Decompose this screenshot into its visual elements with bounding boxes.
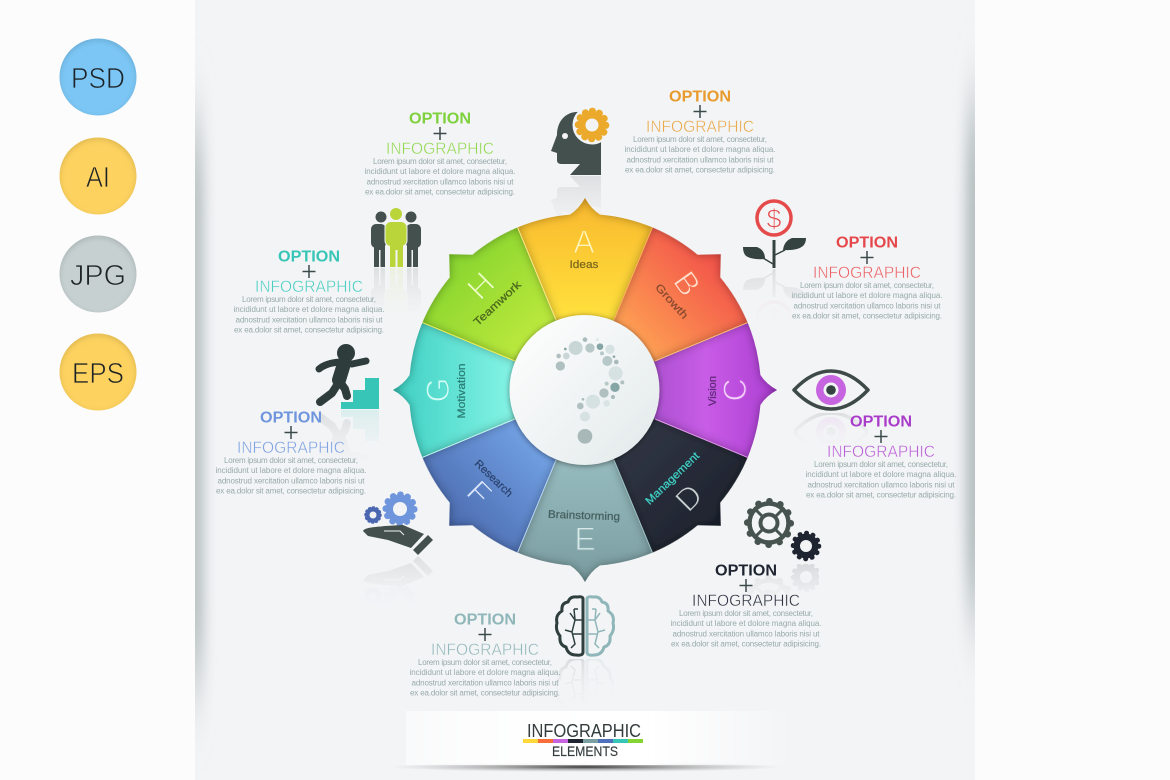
text block: E grey teal: Lorem ipsum dolor sit amet, consectetur, (418, 658, 552, 667)
segment E (518, 455, 652, 582)
text block: F blue: ex ea.dolor sit amet, consectetur adipisicing. (216, 486, 366, 496)
text block: B red: Lorem ipsum dolor sit amet, consectetur, (800, 281, 934, 290)
text block: G teal (234, 248, 384, 334)
letter H and label Teamwork: H (460, 265, 502, 307)
wheel (393, 198, 777, 582)
icon reflections (319, 176, 868, 717)
letter E and label Brainstorming: E (574, 521, 596, 557)
text block: C purple: Lorem ipsum dolor sit amet, consectetur, (814, 460, 948, 469)
text block: F blue: Lorem ipsum dolor sit amet, consectetur, (224, 456, 358, 465)
text block: D dark: OPTION (715, 562, 777, 580)
text block: H green (364, 110, 516, 196)
text block: H green: ex ea.dolor sit amet, consectetur adipisicing. (365, 188, 515, 196)
text block: D dark: INFOGRAPHIC (692, 591, 800, 610)
letter E and label Brainstorming: Brainstorming (548, 509, 620, 523)
badge: PSD (60, 38, 136, 116)
letter A and label Ideas (570, 224, 599, 271)
segment B (583, 207, 768, 392)
text block: F blue (216, 410, 366, 496)
bottom banner (390, 711, 800, 772)
letter H and label Teamwork: Teamwork (472, 278, 524, 329)
text block: G teal: ex ea.dolor sit amet, consectetur adipisicing. (234, 326, 384, 334)
segment edge highlights (422, 227, 748, 553)
letter B and label Growth: Growth (652, 282, 690, 322)
banner subtitle: ELEMENTS (552, 743, 618, 759)
letter C and label Vision (707, 376, 753, 406)
text block: H green: INFOGRAPHIC (386, 139, 494, 158)
text block: D dark: Lorem ipsum dolor sit amet, consectetur, (679, 609, 813, 618)
text block: G teal: adnostrud xercitation ullamco laboris nisi ut (236, 316, 383, 324)
text block: B red: adnostrud xercitation ullamco laboris nisi ut (794, 302, 941, 310)
letter D and label Management: D (668, 477, 710, 519)
text block: A orange: adnostrud xercitation ullamco laboris nisi ut (626, 156, 774, 164)
text block: F blue: incididunt ut labore et dolore magna aliqua. (216, 466, 366, 475)
center disc (510, 315, 660, 465)
banner title: INFOGRAPHIC (527, 721, 641, 741)
letter A and label Ideas: Ideas (570, 259, 599, 271)
text block: C purple: incididunt ut labore et dolore magna aliqua. (806, 470, 956, 479)
text block: G teal: Lorem ipsum dolor sit amet, consectetur, (242, 295, 376, 304)
text block: E grey teal: incididunt ut labore et dolore magna aliqua. (410, 668, 560, 677)
letter G and label Motivation (420, 364, 468, 418)
text block: C purple: INFOGRAPHIC (827, 442, 935, 461)
text block: F blue: OPTION (260, 410, 322, 426)
letter F and label Research: F (460, 473, 499, 512)
letter H and label Teamwork (460, 265, 524, 329)
text block: G teal: INFOGRAPHIC (255, 277, 363, 296)
letter F and label Research (460, 458, 515, 512)
segment C (650, 323, 777, 457)
letter B and label Growth (652, 265, 708, 322)
text block: F blue: adnostrud xercitation ullamco laboris nisi ut (218, 476, 365, 486)
letter A and label Ideas: A (573, 224, 595, 260)
text block: D dark (670, 562, 822, 648)
text block: H green: Lorem ipsum dolor sit amet, consectetur, (373, 157, 507, 166)
badge: JPG (60, 236, 136, 312)
segment G (393, 323, 520, 457)
text block: D dark: ex ea.dolor sit amet, consectetur adipisicing. (671, 640, 821, 648)
text block: G teal: OPTION (278, 248, 340, 266)
segment F (402, 388, 587, 573)
icon: brain (556, 597, 614, 655)
text block: B red (792, 234, 942, 320)
text block: E grey teal: adnostrud xercitation ullamco laboris nisi ut (412, 678, 559, 688)
text block: E grey teal: OPTION (454, 612, 516, 628)
text block: H green: adnostrud xercitation ullamco laboris nisi ut (366, 178, 514, 186)
icon: head with gear (551, 106, 612, 175)
letter E and label Brainstorming (548, 509, 620, 557)
icon: hand holding gears (363, 494, 433, 555)
badge: PSD: PSD (71, 63, 125, 95)
letter C and label Vision: Vision (707, 376, 719, 406)
letter D and label Management (643, 450, 710, 519)
letter C and label Vision: C (717, 378, 753, 402)
segment H (402, 207, 587, 392)
icon: gears (747, 501, 819, 559)
text block: B red: OPTION (836, 234, 898, 252)
text block: G teal: incididunt ut labore et dolore magna aliqua. (234, 305, 384, 314)
text block: A orange: INFOGRAPHIC (646, 117, 754, 136)
text block: A orange: incididunt ut labore et dolore magna aliqua. (624, 145, 776, 154)
text block: A orange (624, 88, 776, 174)
badge: JPG: JPG (70, 260, 126, 292)
icon: money plant (743, 201, 806, 268)
segment A (518, 198, 652, 325)
text block: E grey teal (410, 612, 560, 698)
file format badges (60, 38, 136, 410)
text block: A orange: Lorem ipsum dolor sit amet, consectetur, (633, 135, 767, 144)
colour strip (523, 739, 643, 743)
text block: D dark: incididunt ut labore et dolore magna aliqua. (670, 619, 822, 628)
badge: EPS: EPS (72, 358, 124, 390)
central panel (187, 0, 983, 780)
text block: A orange: OPTION (669, 88, 731, 106)
text block: B red: INFOGRAPHIC (813, 263, 921, 282)
letter B and label Growth: B (666, 265, 708, 303)
text block: E grey teal: INFOGRAPHIC (431, 640, 539, 659)
text block: B red: incididunt ut labore et dolore magna aliqua. (792, 291, 942, 300)
text block: A orange: ex ea.dolor sit amet, consectetur adipisicing. (625, 166, 775, 174)
text block: F blue: INFOGRAPHIC (237, 438, 345, 457)
segment D (583, 388, 768, 573)
badge: AI (60, 138, 136, 214)
badge: EPS (60, 334, 136, 410)
icon: team of people (371, 208, 421, 267)
text block: B red: ex ea.dolor sit amet, consectetur adipisicing. (792, 312, 942, 320)
letter F and label Research: Research (472, 458, 515, 500)
icon: question mark of dots (556, 337, 624, 444)
text block: C purple (806, 414, 956, 500)
icon: eye (794, 371, 868, 409)
badge: AI: AI (86, 162, 110, 194)
text block: D dark: adnostrud xercitation ullamco laboris nisi ut (672, 630, 820, 638)
text block: H green: incididunt ut labore et dolore magna aliqua. (364, 167, 516, 176)
text block: H green: OPTION (409, 110, 471, 128)
text block: C purple: ex ea.dolor sit amet, consectetur adipisicing. (806, 490, 956, 500)
letter D and label Management: Management (643, 450, 702, 507)
text block: C purple: adnostrud xercitation ullamco laboris nisi ut (808, 480, 955, 490)
text block: E grey teal: ex ea.dolor sit amet, consectetur adipisicing. (410, 688, 560, 698)
text block: C purple: OPTION (850, 414, 912, 430)
letter G and label Motivation: Motivation (456, 364, 468, 418)
letter G and label Motivation: G (420, 378, 456, 402)
icon: runner on stairs (319, 344, 379, 409)
